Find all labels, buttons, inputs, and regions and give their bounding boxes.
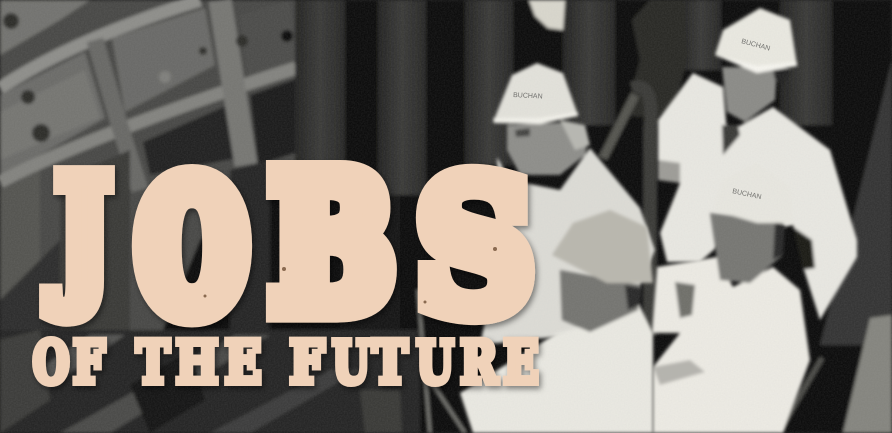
title: OF THE FUTURE: F [290, 328, 324, 397]
title: JOBS: S [417, 142, 533, 353]
white glove at top [529, 0, 565, 30]
lifting hook and rail [418, 0, 822, 433]
paper specks on title [204, 247, 497, 304]
title: OF THE FUTURE [33, 328, 539, 397]
pillars [295, 0, 832, 195]
helmet labels: BUCHAN [740, 38, 771, 53]
tunnel lining: left wall [0, 0, 415, 433]
title: OF THE FUTURE: E [225, 328, 261, 397]
title: OF THE FUTURE: U [416, 329, 454, 397]
helmet labels: BUCHAN [732, 188, 762, 201]
title: OF THE FUTURE: U [332, 329, 370, 397]
title: OF THE FUTURE: R [460, 329, 498, 397]
title: OF THE FUTURE: T [373, 329, 407, 397]
title: OF THE FUTURE: T [136, 329, 170, 397]
title: OF THE FUTURE: E [503, 329, 539, 397]
man bottom left [460, 210, 653, 433]
title: JOBS: J [47, 144, 111, 321]
man bottom right [652, 163, 810, 433]
lower left lining [0, 330, 420, 433]
man top right [658, 8, 857, 320]
helmet labels [513, 38, 771, 201]
title: JOBS [47, 136, 533, 353]
helmet labels: BUCHAN [513, 92, 543, 101]
title: JOBS: O [139, 149, 245, 349]
title: JOBS: B [271, 136, 393, 351]
title: OF THE FUTURE: F [73, 329, 105, 397]
title: OF THE FUTURE: O [33, 328, 69, 396]
right wall [820, 60, 892, 345]
title: OF THE FUTURE: H [176, 329, 218, 397]
man left [480, 63, 655, 345]
tunnel lining: rivets [3, 13, 293, 142]
